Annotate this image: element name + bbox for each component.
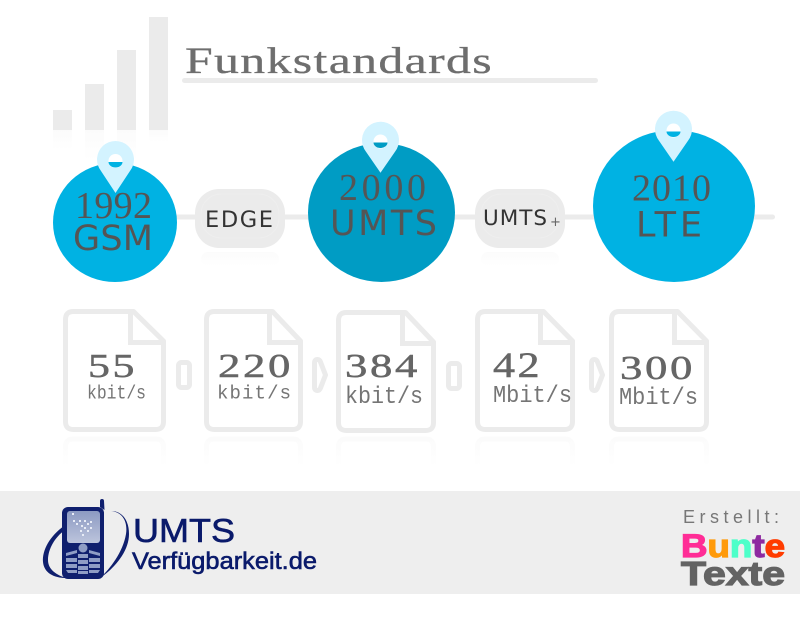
icon: map pin	[362, 122, 399, 173]
document: 55 kbit/s: kbit/s	[87, 382, 146, 404]
pill: UMTS+: UMTS	[483, 206, 547, 231]
document: 300 Mbit/s: Mbit/s	[619, 385, 698, 412]
connector: arrow	[314, 360, 326, 390]
document: 55 kbit/s: 55	[88, 348, 137, 385]
footer band	[0, 491, 800, 594]
icon: map pin	[655, 111, 692, 162]
logo: UMTS Verfügbarkeit.de: Verfügbarkeit.de	[132, 548, 317, 575]
document: 300 Mbit/s	[612, 312, 707, 467]
document: 55 kbit/s	[66, 312, 164, 467]
document: 220 kbit/s: 220	[218, 348, 293, 385]
circle: 2010 LTE: LTE	[636, 206, 702, 246]
circle: 1992 GSM	[53, 141, 177, 282]
credit: Erstellt Bunte Texte: Texte	[681, 555, 785, 592]
circle: 2010 LTE: 2010	[632, 168, 711, 210]
pill: EDGE: EDGE	[205, 207, 273, 233]
credit: Erstellt Bunte Texte	[681, 507, 785, 592]
circle: 1992 GSM: GSM	[73, 219, 153, 259]
pill: EDGE	[195, 189, 285, 266]
circle: 2000 UMTS: 2000	[339, 167, 426, 209]
document: 384 kbit/s: kbit/s	[345, 384, 423, 411]
document: 42 Mbit/s: 42	[493, 345, 542, 385]
document: 42 Mbit/s: Mbit/s	[493, 383, 572, 410]
timeline line	[170, 214, 775, 220]
document: 220 kbit/s	[206, 312, 301, 467]
logo: UMTS Verfügbarkeit.de	[43, 499, 317, 579]
circle: 2010 LTE	[593, 111, 755, 282]
circle: 1992 GSM: 1992	[75, 185, 152, 227]
document: 384 kbit/s: 384	[345, 348, 420, 385]
connector: arrow	[592, 360, 602, 390]
icon: phone with swoosh	[43, 499, 129, 579]
title underline	[182, 78, 598, 83]
icon: signal strength bars	[53, 17, 168, 160]
connector: rectangle	[178, 362, 190, 388]
credit: Erstellt Bunte Texte: Erstellt:	[683, 507, 779, 527]
connector: rectangle	[448, 364, 460, 388]
credit: Erstellt Bunte Texte: Bunte	[681, 528, 785, 564]
document: 220 kbit/s: kbit/s	[217, 382, 291, 404]
logo: UMTS Verfügbarkeit.de: UMTS	[133, 513, 235, 550]
pill: UMTS+: +	[550, 215, 561, 230]
title: Funkstandards	[185, 41, 493, 82]
circle: 2000 UMTS	[308, 122, 455, 282]
pill: UMTS+	[475, 189, 565, 266]
document: 42 Mbit/s	[478, 312, 573, 467]
icon: map pin	[97, 141, 134, 193]
document: 384 kbit/s	[338, 312, 434, 467]
circle: 2000 UMTS: UMTS	[330, 204, 437, 244]
document: 300 Mbit/s: 300	[620, 350, 695, 387]
